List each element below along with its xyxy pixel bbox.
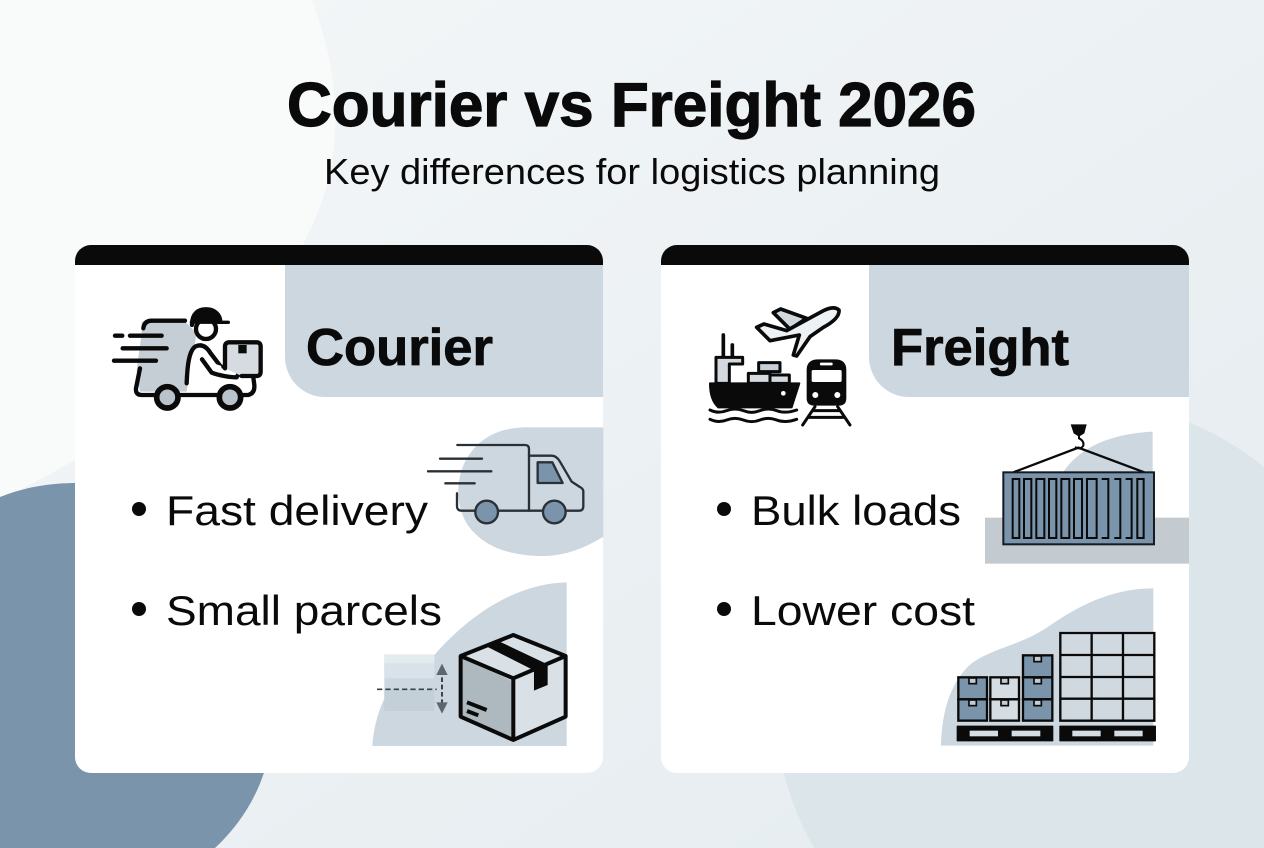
subtitle: Key differences for logistics planning (324, 151, 940, 192)
heading tab (285, 265, 603, 397)
bullet: bulk loads: Bulk loads (751, 487, 961, 534)
bullet list (132, 487, 442, 634)
ship (723, 335, 732, 358)
bullet list (717, 487, 975, 634)
heading tab (869, 265, 1189, 397)
bullet: lower cost: Lower cost (751, 587, 975, 634)
panel: freight (661, 245, 1189, 773)
illustration: truck (428, 427, 603, 556)
icon: courier rider (114, 309, 261, 408)
heading: freight: Freight (891, 319, 1069, 377)
title: Courier vs Freight 2026 (287, 71, 976, 140)
heading: courier: Courier (306, 319, 493, 377)
panel: courier (75, 245, 603, 773)
panel top bar (661, 245, 1189, 265)
blob: bottom-left blue (0, 483, 275, 848)
illustration: parcel box (372, 582, 567, 746)
panel top bar (75, 245, 603, 265)
illustration: pallets of boxes (941, 588, 1156, 746)
bullet: small parcels: Small parcels (166, 587, 442, 634)
train (807, 360, 846, 405)
illustration: container on crane hook (985, 424, 1189, 564)
icon: ship, plane, train (710, 308, 850, 425)
plane (773, 309, 807, 329)
bullet: fast delivery: Fast delivery (166, 487, 428, 534)
